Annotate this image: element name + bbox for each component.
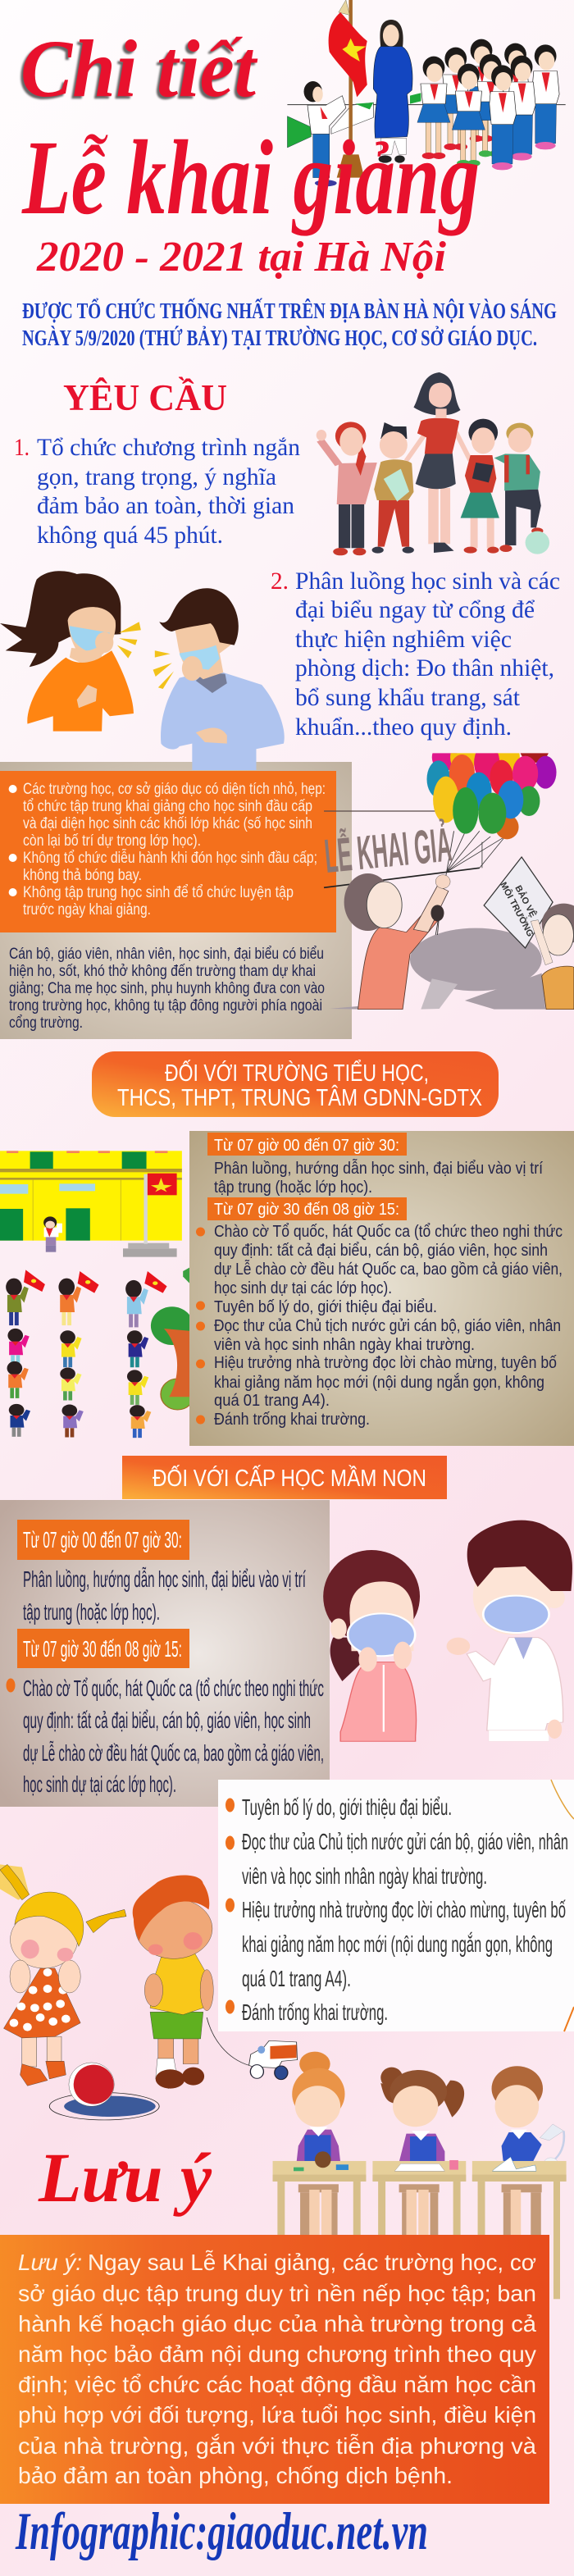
illustration: three children at desks (273, 2052, 567, 2299)
text: first activity: tập trung (hoặc lớp học). (214, 1179, 372, 1197)
subtitle: year and city: 2020 - 2021 tại Hà Nội (36, 234, 447, 280)
panel: note (0, 2235, 549, 2504)
text: note body: định; việc tổ chức các hoạt động đầu năm học cần (18, 2372, 536, 2397)
illustration: school yard with pupils saluting (0, 1151, 194, 1438)
time label: 07:30 to 08:15: Từ 07 giờ 30 đến 08 giờ 15: (23, 1636, 182, 1662)
panel: orange restrictions box: trước ngày khai giảng. (23, 901, 151, 919)
time label: 07:30 to 08:15: Từ 07 giờ 30 đến 08 giờ 15: (214, 1201, 399, 1219)
bullets (196, 1227, 205, 1424)
illustration: two masked children (323, 1521, 572, 1741)
requirement 2: Phân luồng học sinh và các (295, 568, 560, 595)
text: note body: của nhà trường, gắn với thực tiễn địa phương và (18, 2433, 536, 2459)
panel: orange restrictions box: Không tập trung học sinh để tổ chức luyện tập (23, 884, 294, 901)
illustration: boy, girl, ball and toy car (0, 1864, 297, 2120)
text: flag salute: Chào cờ Tổ quốc, hát Quốc ca (tổ chức theo nghi thức (23, 1676, 324, 1701)
text: health conditions: giảng; Cha mẹ học sinh, phụ huynh không đưa con vào (9, 980, 325, 997)
requirement 1: đảm bảo an toàn, thời gian (37, 492, 294, 519)
text: note body: Lưu ý: (18, 2250, 82, 2275)
text: flag salute: quy định: tất cả đại biểu, cán bộ, giáo viên, học sinh (23, 1707, 311, 1733)
placard text: BẢO VỆ (512, 883, 539, 919)
panel: preschool schedule (0, 1500, 330, 1807)
text: agenda lines: Đánh trống khai trường. (242, 1999, 388, 2025)
text: agenda lines (242, 1794, 568, 2025)
text: note body (18, 2250, 536, 2488)
text: ceremony agenda: Tuyên bố lý do, giới thiệu đại biểu. (214, 1298, 437, 1316)
section heading: primary and secondary schools (92, 1051, 499, 1117)
time label: 07:00 to 07:30 (17, 1520, 189, 1560)
illustration: coughing woman (0, 571, 141, 732)
panel: orange restrictions box: Không tổ chức diễu hành khi đón học sinh đầu cấp; (23, 849, 317, 867)
section heading: primary and secondary schools: ĐỐI VỚI TRƯỜNG TIỂU HỌC, (165, 1059, 429, 1087)
text: ceremony agenda (214, 1223, 563, 1429)
illustration: flag salute with teacher and pupils (287, 0, 566, 186)
text: ceremony agenda: viên và học sinh nhân ngày khai trường. (214, 1336, 475, 1354)
text: flag salute (23, 1676, 324, 1797)
text: ceremony agenda: quá 01 trang A4). (214, 1392, 330, 1410)
time label: 07:00 to 07:30: Từ 07 giờ 00 đến 07 giờ 30: (23, 1527, 182, 1552)
panel: orange restrictions box: không thả bóng bay. (23, 867, 142, 884)
illustration: balloons and opening ceremony sign (322, 736, 574, 1010)
text: note body: Ngay sau Lễ Khai giảng, các trường học, cơ (88, 2250, 536, 2275)
tree (151, 1267, 194, 1410)
text: note body: sở giáo dục tập trung duy trì nền nếp học tập; ban (18, 2281, 536, 2306)
section heading: preschool: ĐỐI VỚI CẤP HỌC MẦM NON (153, 1464, 426, 1492)
panel: orange restrictions box: Các trường học, cơ sở giáo dục có diện tích nhỏ, hẹp: (23, 781, 326, 798)
panel: preschool agenda on white (218, 1780, 574, 2031)
panel: schedule for schools (189, 1131, 574, 1446)
requirement 2: bổ sung khẩu trang, sát (295, 684, 521, 711)
text: health conditions: hiện ho, sốt, khó thở không đến trường tham dự khai (9, 963, 316, 980)
bullet (7, 1678, 15, 1693)
panel: orange restrictions box: còn lại bố trí dự trong lớp học). (23, 832, 201, 850)
heading: Lưu ý: Lưu ý (38, 2138, 212, 2217)
text: first activity (214, 1159, 543, 1197)
requirement 2: thực hiện nghiêm việc (295, 626, 512, 653)
text: ceremony agenda: học sinh dự tại các lớp học). (214, 1279, 392, 1297)
requirement 1: không quá 45 phút. (37, 522, 223, 549)
requirement 2: đại biểu ngay từ cổng để (295, 596, 535, 623)
requirement 1: 1. (14, 434, 30, 461)
text: note body: năm học bảo đảm nội dung chương trình theo quy (18, 2341, 536, 2367)
bullets (226, 1798, 235, 2014)
text: health conditions: trong trường học, không tụ tập đông người phía ngoài (9, 997, 322, 1014)
text: note body: phù hợp với đối tượng, lứa tuổi học sinh, điều kiện (18, 2402, 536, 2428)
title: Chi tiết: Chi tiết (20, 23, 258, 114)
panel: orange restrictions box (0, 771, 336, 932)
placard text: MÔI TRƯỜNG (498, 880, 535, 938)
requirement 2: phòng dịch: Đo thân nhiệt, (295, 654, 554, 682)
text: first activity (23, 1566, 306, 1625)
illustration: coughing man (153, 588, 285, 770)
text: flag salute: dự Lễ chào cờ đều hát Quốc ca, bao gồm cả giáo viên, (23, 1740, 324, 1766)
requirement 1 (14, 434, 300, 549)
heading: YÊU CẦU: YÊU CẦU (63, 377, 227, 418)
text: flag salute: học sinh dự tại các lớp học). (23, 1771, 176, 1797)
text: first activity: Phân luồng, hướng dẫn học sinh, đại biểu vào vị trí (23, 1566, 306, 1592)
flags and pupils (6, 1270, 167, 1438)
section heading: primary and secondary schools: THCS, THPT, TRUNG TÂM GDNN-GDTX (117, 1084, 482, 1111)
requirement 1: gọn, trang trọng, ý nghĩa (37, 463, 276, 490)
requirement 2: khuẩn...theo quy định. (295, 714, 512, 741)
text: health conditions: cổng trường. (9, 1014, 83, 1032)
time label: 07:00 to 07:30: Từ 07 giờ 00 đến 07 giờ 30: (214, 1137, 399, 1155)
section heading: preschool (122, 1456, 447, 1499)
requirement 2 (271, 568, 560, 741)
illustration: teacher and students group (317, 372, 549, 555)
text: ceremony agenda: Đánh trống khai trường. (214, 1411, 370, 1429)
text: agenda lines: quá 01 trang A4). (242, 1966, 351, 1991)
panel: orange restrictions box: và đại diện học sinh các khối lớp khác (số học sinh (23, 815, 312, 832)
requirement 1: Tổ chức chương trình ngắn (37, 434, 300, 461)
panel: general rules (0, 588, 352, 1039)
time label: 07:30 to 08:15 (17, 1629, 189, 1668)
text: note body: bảo đảm an toàn phòng, chống dịch bệnh. (18, 2463, 453, 2488)
panel: orange restrictions box: tổ chức tập trung khai giảng cho học sinh đầu cấp (23, 798, 312, 815)
text: health conditions: Cán bộ, giáo viên, nhân viên, học sinh, đại biểu có biểu (9, 946, 324, 963)
intro text (22, 298, 557, 350)
text: first activity: tập trung (hoặc lớp học). (23, 1599, 160, 1625)
requirement 2: 2. (271, 568, 289, 595)
text: note body: hành kế hoạch giáo dục của nhà trường trong cả (18, 2311, 536, 2337)
text: health conditions (9, 946, 325, 1032)
